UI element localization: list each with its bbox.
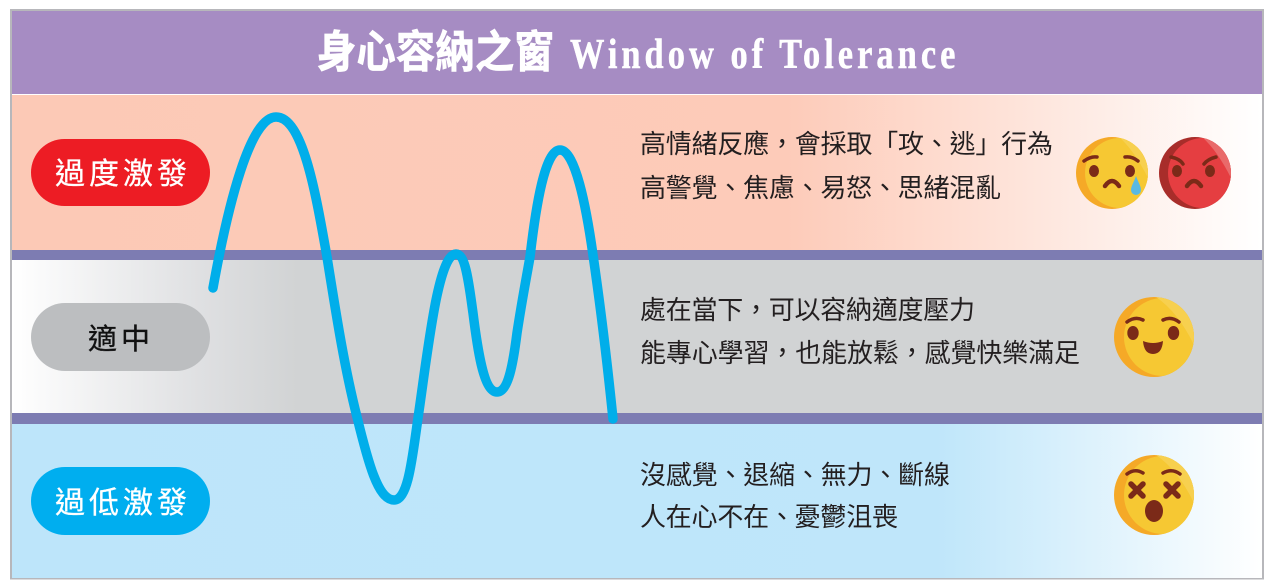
title: Window of Tolerance bbox=[570, 32, 955, 78]
upper window boundary bbox=[12, 250, 1262, 260]
text block: hypoarousal description: 人在心不在、憂鬱沮喪 bbox=[640, 502, 898, 532]
pill label: hypoarousal bbox=[31, 467, 210, 535]
text block: hypoarousal description bbox=[640, 460, 950, 532]
pill label: hyperarousal bbox=[31, 139, 210, 206]
pill label: moderate: 適中 bbox=[88, 323, 150, 356]
pill label: moderate bbox=[31, 303, 210, 371]
text block: moderate description: 能專心學習，也能放鬆，感覺快樂滿足 bbox=[640, 338, 1080, 368]
pill label: hyperarousal: 過度激發 bbox=[55, 158, 187, 191]
lower window boundary bbox=[12, 413, 1262, 424]
panel: title banner bbox=[12, 11, 1262, 94]
panel: hypoarousal band bbox=[12, 424, 1262, 578]
pill label: hypoarousal: 過低激發 bbox=[55, 487, 187, 520]
arousal wave curve bbox=[213, 117, 613, 500]
icon: happy face bbox=[1114, 297, 1194, 377]
text block: hyperarousal description: 高警覺、焦慮、易怒、思緒混亂 bbox=[640, 173, 1001, 203]
text block: moderate description: 處在當下，可以容納適度壓力 bbox=[640, 295, 975, 325]
text block: hyperarousal description: 高情緒反應，會採取「攻、逃」行為 bbox=[640, 129, 1053, 159]
text block: hyperarousal description bbox=[640, 129, 1053, 203]
icon: angry face bbox=[1159, 137, 1231, 209]
icon: dizzy face bbox=[1114, 455, 1194, 535]
text block: moderate description bbox=[640, 295, 1080, 368]
panel: moderate band bbox=[12, 260, 1262, 413]
title: 身心容納之窗 bbox=[317, 27, 554, 77]
icon: sad crying face bbox=[1076, 137, 1148, 209]
panel: hyperarousal band bbox=[12, 95, 1262, 250]
text block: hypoarousal description: 沒感覺、退縮、無力、斷線 bbox=[640, 460, 950, 490]
title bbox=[317, 27, 955, 78]
